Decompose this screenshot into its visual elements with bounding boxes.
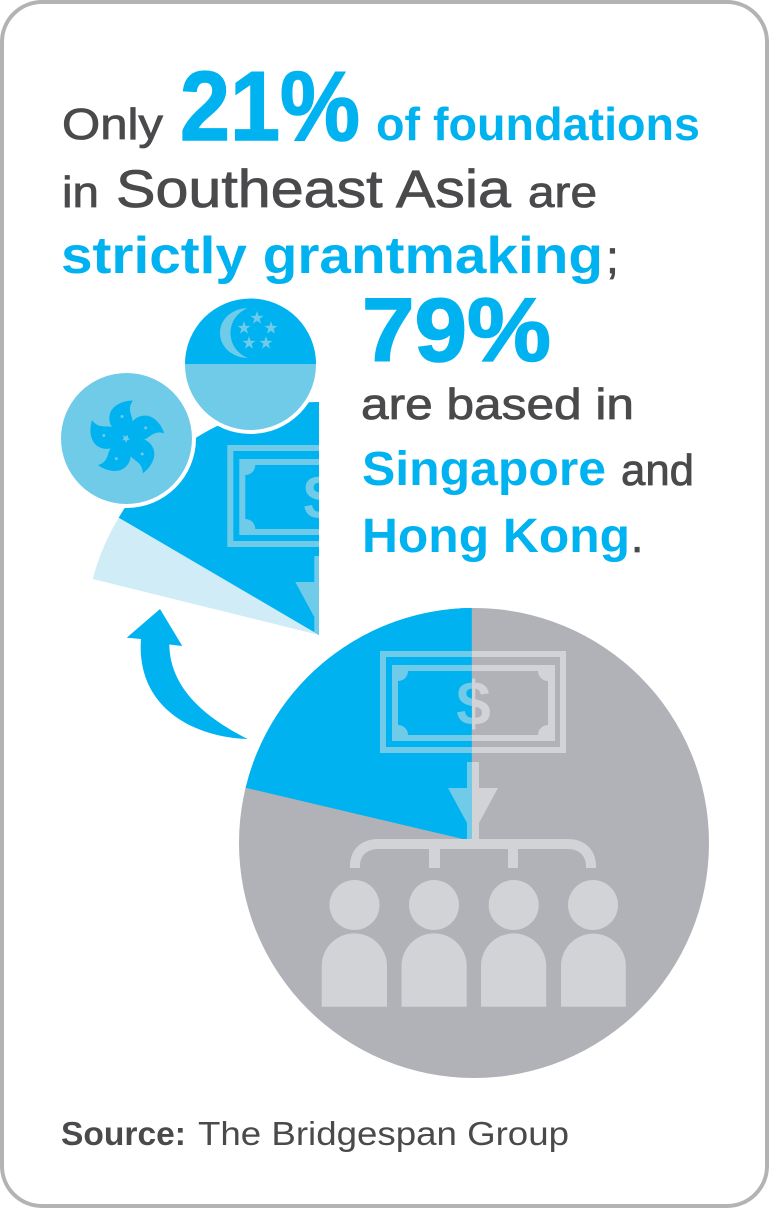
slice: Singapore and Hong Kong share: [119, 402, 319, 635]
pie: 21 percent wedge: [246, 608, 472, 841]
headline line 2: are: [528, 168, 597, 217]
slice: other share: [93, 518, 319, 635]
callout text: are based in: [361, 380, 634, 429]
arrow: curved up to exploded slice: [127, 609, 248, 739]
headline: [61, 51, 700, 285]
headline line 1: [62, 51, 700, 161]
icon: money bill and arrow: $: [456, 670, 491, 739]
icon: money bill and arrow: [240, 600, 566, 845]
icon: four people: [322, 880, 626, 1007]
headline line 2: [62, 160, 597, 219]
callout text: and: [621, 446, 694, 495]
headline line 1: of foundations: [376, 98, 700, 150]
callout: 79 percent: [361, 281, 694, 563]
icon: branching connector: [350, 839, 596, 868]
headline line 1: Only: [62, 100, 163, 149]
callout text: .: [631, 513, 643, 562]
callout text: Singapore: [362, 443, 606, 496]
headline line 2: in: [62, 168, 99, 217]
icon: Singapore flag: [181, 295, 320, 434]
headline line 3: ;: [606, 231, 619, 283]
big number: 79%: [362, 281, 551, 381]
callout text: [361, 380, 694, 563]
icon: money and arrow on slice: [227, 445, 319, 635]
headline line 3: strictly grantmaking: [61, 227, 603, 285]
icon: Hong Kong flag: [57, 369, 196, 508]
headline line 1: 21%: [180, 51, 360, 161]
source note: Source:: [61, 1115, 186, 1152]
callout text: Hong Kong: [362, 510, 630, 563]
icon: money and arrow on slice: $: [304, 464, 338, 533]
exploded pie slice: [92, 402, 319, 635]
icon: money bill and arrow: $: [456, 670, 491, 739]
source note: The Bridgespan Group: [198, 1115, 569, 1152]
source note: [61, 1115, 569, 1152]
pie: remaining share: [239, 608, 709, 1078]
headline line 2: Southeast Asia: [116, 160, 512, 219]
pie chart: [239, 600, 709, 1078]
